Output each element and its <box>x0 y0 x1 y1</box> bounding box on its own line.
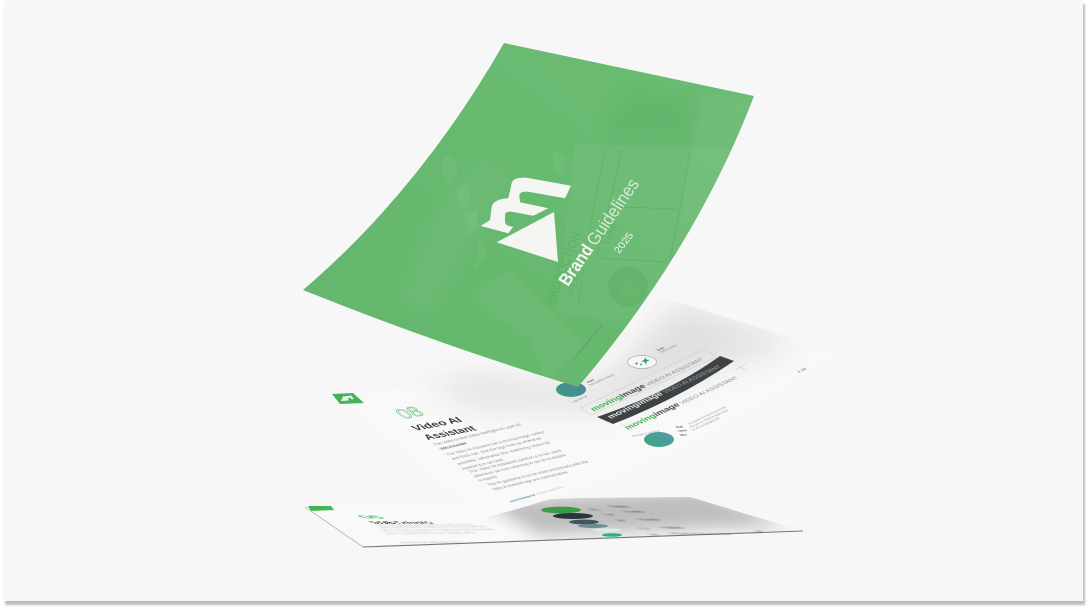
logo on white: moving <box>588 393 625 413</box>
section title <box>409 416 480 442</box>
logo with guides: image <box>650 401 682 418</box>
clapperboard panel <box>557 144 735 322</box>
middle sheet shadow from cover <box>420 300 800 410</box>
swatch labels: RGB 111 140 140 <box>655 526 688 529</box>
ground shadow <box>420 379 600 440</box>
body copy: The Video AI Assistant has a moving image symbol <box>445 430 547 457</box>
lower sheet body text: The movingimage colour palette is used across all <box>373 523 477 526</box>
swatch labels: RGB 62 85 97 <box>633 518 666 521</box>
body copy: The AI guidance is to be used exclusively with the <box>486 460 591 487</box>
swatch labels: RGB 43 52 59 <box>618 510 649 513</box>
swatch labels: 1 22 <box>750 530 767 532</box>
logo on white: image <box>616 382 648 399</box>
logo with guides: VIDEO AI ASSISTANT <box>679 376 740 406</box>
lower sheet side edge <box>305 507 363 547</box>
icon captions: Outline version <box>659 344 678 354</box>
darker photo region <box>600 90 695 142</box>
logo on dark <box>605 363 723 420</box>
page footer: Brand Guidelines <box>536 486 565 495</box>
cover title <box>554 175 643 289</box>
sheet: colour palette page <box>304 497 803 548</box>
soft arm highlight <box>395 160 510 320</box>
icon captions <box>571 344 678 404</box>
swatch labels: Slate <box>611 519 630 522</box>
swatch labels: Green <box>583 508 604 511</box>
body copy: The Video AI Assistant symbol is to be used <box>467 449 564 474</box>
gradient disc <box>644 432 674 447</box>
clapperboard ghost text: SCENE <box>565 271 583 297</box>
hand highlight <box>470 270 585 385</box>
logo m mark <box>481 178 571 233</box>
middle sheet paper <box>345 298 835 518</box>
lower sheet title: RGB Colours <box>366 521 439 525</box>
gradient specification text <box>631 405 730 438</box>
swatch labels: Mint <box>643 533 663 536</box>
body copy: Video AI Assistant. <box>438 441 469 451</box>
colour swatches <box>541 507 622 537</box>
lower sheet body text <box>373 523 497 543</box>
section title: Video AI <box>409 416 465 433</box>
body copy: whenever an icon referring to our AI Assistant <box>472 453 569 479</box>
lower sheet shadow from middle sheet <box>480 490 790 535</box>
logo on white: VIDEO AI ASSISTANT <box>645 357 706 387</box>
gradient specification text: RGB <box>675 425 685 429</box>
lower sheet edge <box>363 531 803 547</box>
logo with guides <box>622 374 740 431</box>
lower sheet paper <box>305 497 803 547</box>
cover title: Guidelines <box>582 175 643 249</box>
cover sheet <box>303 43 754 387</box>
clapper stripes <box>442 150 566 270</box>
gradient specification text: CMYK <box>677 429 689 433</box>
page number: 1 24 <box>796 367 808 374</box>
section number: 06 <box>353 515 390 519</box>
icon captions: Solid gradient version <box>588 373 616 387</box>
lower sheet body text: when choosing colours for digital and printed output <box>378 528 497 531</box>
slate line <box>573 325 602 360</box>
lighter right band <box>680 95 754 230</box>
gradient specification text: The gradient runs from the green to the <box>687 405 728 426</box>
icon captions: Icon <box>586 378 595 384</box>
logo on white <box>588 355 706 413</box>
cover photo overlay <box>456 148 730 360</box>
swatch labels <box>583 505 767 536</box>
lower sheet body text: www.movingimage.com <box>395 541 464 543</box>
logo on dark: moving <box>605 401 642 420</box>
body copy: and fonts can. Use the logo lock-up whenever <box>450 436 544 461</box>
dark logo bar <box>597 356 734 424</box>
logo on dark: image <box>633 390 665 407</box>
clapperboard lines <box>578 150 690 307</box>
body copy: Assistant icon can used. <box>460 458 506 471</box>
cover paper <box>303 43 754 387</box>
sheet: video AI assistant spread <box>332 298 835 518</box>
lower sheet tab <box>308 506 334 511</box>
icon captions: Icon <box>656 346 665 352</box>
clapperboard ghost text: TAKE <box>601 221 619 247</box>
page footer: www.movingimage.com <box>508 493 537 503</box>
gradient specification text: Gradient version <box>631 430 661 438</box>
logo triangle <box>497 212 558 262</box>
logo frame <box>580 349 716 415</box>
guide marks <box>622 364 747 431</box>
body copy: Video AI Assistant logo and communications. <box>491 470 571 492</box>
outlined icon disc <box>628 356 656 368</box>
page footer <box>508 486 565 503</box>
tab logo mark <box>341 396 354 401</box>
clapperboard ghost text <box>546 224 616 305</box>
section tab <box>332 393 364 404</box>
swatch labels: Teal <box>633 527 654 530</box>
gradient specification text: blue tone at a forty five degree angle <box>689 408 730 429</box>
logo on dark: VIDEO AI ASSISTANT <box>662 365 723 395</box>
body copy: is required. <box>477 475 500 483</box>
lower sheet body text: Use the values listed for each colour swatch <box>381 532 480 534</box>
gradient specification text: for all icon backgrounds <box>691 416 721 432</box>
lower sheet body text: brand communication material and must be respected <box>375 525 489 528</box>
icon captions: Logo lock-up <box>571 395 588 404</box>
section title: Assistant <box>421 424 480 442</box>
teal icon disc <box>556 382 586 397</box>
swatch labels: RGB 60 155 70 <box>603 505 634 508</box>
cover year: 2025 <box>612 231 637 256</box>
ghost circle logo <box>608 267 648 307</box>
logo with guides: moving <box>622 412 659 431</box>
body copy <box>432 423 591 492</box>
swatch labels: Dark <box>598 513 619 516</box>
body copy: The video-to-text Video Intelligence Layer AI <box>432 423 523 447</box>
gradient specification text: HEX <box>679 433 689 437</box>
swatch labels: RGB 42 176 127 secondary <box>665 532 734 535</box>
section number: 08 <box>391 404 429 422</box>
body copy: possible, otherwise the matching Video AI <box>455 441 552 466</box>
cover title: Brand <box>554 241 598 289</box>
clapperboard ghost text: PRODUCTION <box>542 229 584 307</box>
